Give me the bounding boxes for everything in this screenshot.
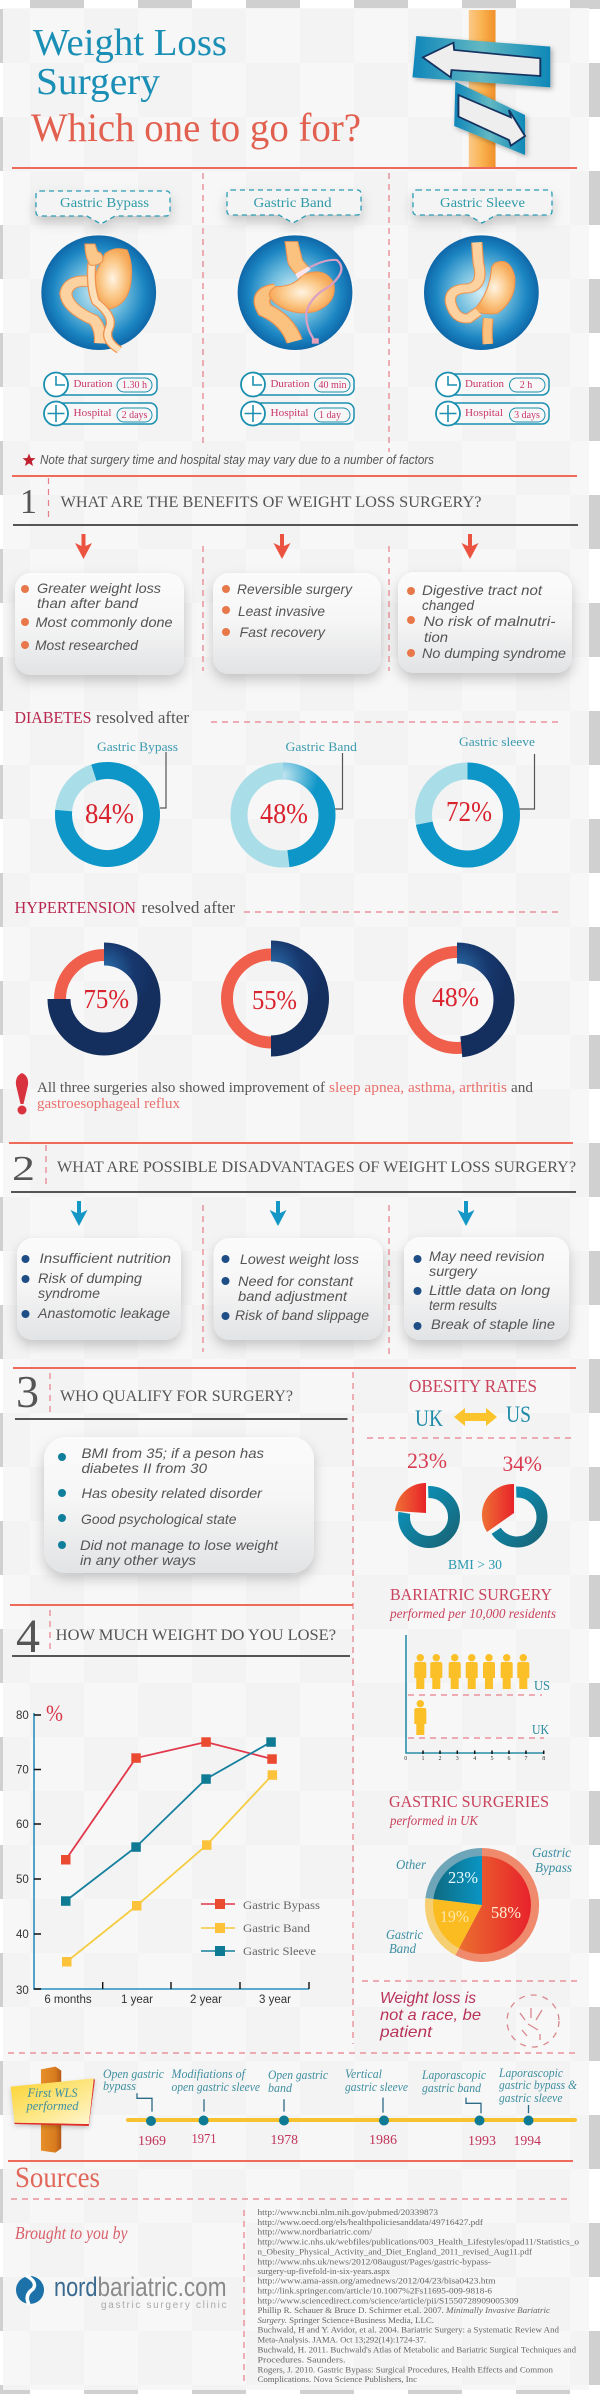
text: source list: http://www.ama-assn.org/amednews/2012/04/23/bisa0423.htm	[258, 2276, 496, 2286]
panel: obesity rates	[367, 1376, 573, 1573]
heading: diabetes	[14, 708, 559, 727]
event 1993: Laporascopic	[421, 2068, 486, 2082]
panel: disadvantages sleeve: May need revision	[429, 1248, 545, 1264]
panel: disadvantages sleeve: Little data on long	[429, 1282, 550, 1298]
panel: disadvantages bypass: syndrome	[38, 1285, 100, 1301]
section 1 heading: 1	[20, 482, 37, 521]
chart: hypertension 55 donut: 55%	[252, 985, 297, 1015]
series: gastric bypass	[61, 1737, 277, 1864]
section 4 heading: 4	[16, 1610, 40, 1663]
chart: diabetes bypass donut: Gastric Bypass	[97, 739, 178, 754]
panel: disadvantages band: Need for constant	[238, 1273, 354, 1289]
heading: hypertension: resolved after	[142, 898, 235, 917]
icon: first WLS signpost: First WLS	[27, 2086, 78, 2100]
hospital row: Hospital	[465, 407, 503, 419]
panel: gastric sleeve	[413, 190, 552, 426]
chart: weight loss line chart: 6 months	[44, 1994, 92, 2006]
chart: people per 10,000 residents: 0	[404, 1756, 407, 1762]
panel: disadvantages sleeve: Break of staple line	[431, 1316, 555, 1332]
chart: weight loss line chart: 40	[16, 1929, 29, 1941]
chart legend	[201, 1898, 320, 1958]
text: brought to you by: Brought to you by	[15, 2223, 128, 2243]
chart: people per 10,000 residents: 6	[508, 1756, 510, 1762]
event 1994: 1994	[514, 2134, 541, 2149]
panel: disadvantages sleeve: term results	[429, 1297, 497, 1313]
text: source list: Surgery. Springer Science+Business Media, LLC.	[258, 2315, 434, 2325]
text: source list: http://www.ncbi.nlm.nih.gov/pubmed/20339873	[258, 2207, 438, 2217]
panel: gastric bypass	[36, 191, 170, 426]
panel: bariatric surgery: BARIATRIC SURGERY	[390, 1585, 552, 1604]
panel: who qualifies: BMI from 35; if a peson has	[82, 1445, 264, 1461]
chart: gastric surgeries pie: 23%	[448, 1868, 478, 1887]
chart: hypertension 48 donut	[409, 952, 505, 1048]
series: gastric sleeve	[61, 1737, 276, 1906]
event 1971: 1971	[192, 2132, 216, 2147]
panel: benefits sleeve: No risk of malnutri-	[424, 613, 556, 629]
arrow: benefits bypass	[75, 534, 92, 559]
icon: gastric band stomach	[238, 235, 352, 350]
title: Surgery	[36, 61, 160, 103]
panel: benefits sleeve: changed	[422, 597, 475, 613]
panel: benefits band: Fast recovery	[240, 624, 326, 640]
event 1986: 1986	[369, 2133, 397, 2148]
panel: benefits bypass: Most commonly done	[36, 614, 173, 630]
chart: diabetes bypass donut: 84%	[85, 799, 134, 830]
event 1994: gastric sleeve	[499, 2091, 563, 2105]
duration row: 1.30 h	[122, 380, 147, 391]
section 1 heading	[13, 478, 578, 526]
panel: who qualifies: Good psychological state	[81, 1511, 237, 1527]
panel: obesity rates: 34%	[502, 1451, 542, 1476]
panel: gastric surgeries: Other	[396, 1858, 426, 1873]
panel: obesity rates: OBESITY RATES	[409, 1376, 537, 1396]
event 1971	[171, 2067, 260, 2147]
text: other improvements: gastroesophageal reflux	[37, 1096, 180, 1112]
panel: gastric band	[227, 190, 361, 426]
hospital row: 2 days	[122, 410, 148, 421]
section 4 heading	[10, 1604, 353, 1663]
panel: disadvantages bypass: Risk of dumping	[38, 1270, 142, 1286]
note with star: Note that surgery time and hospital stay may vary due to a number of factors	[40, 453, 434, 467]
event 1969: Open gastric	[103, 2067, 164, 2081]
callout: gastric band: Gastric Band	[254, 196, 332, 211]
section 2 heading: 2	[12, 1149, 35, 1188]
text: other improvements	[37, 1080, 533, 1112]
hospital row	[44, 402, 157, 426]
panel: bariatric surgery: performed per 10,000 residents	[389, 1607, 557, 1622]
text: source list: Buchwald, H and Y. Avidor, et al. 2004. Bariatric Surgery: a Systematic Review And	[258, 2325, 560, 2335]
event 1969	[103, 2067, 166, 2149]
callout: gastric sleeve	[413, 190, 552, 223]
chart legend: Gastric Bypass	[243, 1898, 320, 1912]
event 1978	[268, 2068, 328, 2148]
duration row	[44, 372, 157, 396]
callout: gastric band	[227, 190, 361, 223]
icon: double arrow	[454, 1408, 497, 1426]
heading: sources: Sources	[15, 2161, 100, 2194]
panel: who qualifies: diabetes II from 30	[82, 1460, 207, 1476]
chart: weight loss line chart	[16, 1701, 320, 2006]
icon: exclamation mark	[16, 1073, 28, 1114]
text: source list: Buchwald, H. 2011. Buchwald's Atlas of Metabolic and Bariatric Surgical Techniques and	[258, 2345, 577, 2355]
chart: diabetes band donut: Gastric Band	[286, 739, 358, 754]
hospital row	[436, 402, 549, 426]
chart: diabetes band donut: 48%	[260, 799, 308, 830]
event 1978: Open gastric	[268, 2068, 328, 2082]
title: Weight Loss	[33, 22, 227, 64]
chart: weight loss line chart: 50	[16, 1874, 29, 1886]
arrow: disadvantages sleeve	[458, 1201, 474, 1226]
callout: weight loss is not a race: not a race, be	[380, 2007, 481, 2024]
callout: weight loss is not a race: patient	[379, 2024, 433, 2041]
heading: hypertension: HYPERTENSION	[14, 898, 136, 917]
chart: people per 10,000 residents: 2	[438, 1756, 442, 1762]
event 1971: Modifiations of	[171, 2067, 246, 2081]
text: source list: http://www.nhs.uk/news/2012/08august/Pages/gastric-bypass-	[258, 2256, 491, 2266]
event 1993: gastric band	[422, 2081, 482, 2095]
arrow: disadvantages bypass	[70, 1201, 88, 1226]
panel: obesity rates: UK	[415, 1406, 443, 1431]
section 2 heading: WHAT ARE POSSIBLE DISADVANTAGES OF WEIGHT LOSS SURGERY?	[57, 1159, 576, 1176]
heading: diabetes: resolved after	[96, 708, 189, 727]
event 1986: Vertical	[345, 2067, 382, 2081]
section 3 heading: WHO QUALIFY FOR SURGERY?	[60, 1388, 293, 1405]
icon: gastric sleeve stomach	[424, 235, 539, 350]
panel: gastric surgeries: Gastric	[532, 1846, 572, 1861]
title	[31, 22, 361, 150]
text: source list: http://www.ic.nhs.uk/webfiles/publications/003_Health_Lifestyles/opad11/Statistics_o	[258, 2237, 579, 2247]
panel: disadvantages bypass: Insufficient nutrition	[40, 1250, 171, 1266]
heading: hypertension	[14, 898, 562, 917]
panel: disadvantages sleeve: surgery	[429, 1263, 478, 1279]
arrow: benefits sleeve	[462, 534, 478, 559]
callout: gastric sleeve: Gastric Sleeve	[440, 196, 525, 211]
logo: nordbariatric.com: nord	[54, 2272, 98, 2302]
chart: weight loss line chart: 2 year	[190, 1994, 222, 2006]
chart: UK obesity donut	[395, 1483, 454, 1542]
panel: benefits sleeve: Digestive tract not	[422, 582, 543, 598]
chart: gastric surgeries pie: 58%	[491, 1903, 521, 1922]
panel: disadvantages band: band adjustment	[238, 1288, 348, 1304]
panel: benefits bypass: Greater weight loss	[37, 580, 161, 596]
text: source list: Rogers, J. 2010. Gastric Bypass: Surgical Procedures, Health Effects and Common	[258, 2364, 554, 2374]
text: source list: Phillip R. Schauer & Bruce D. Schirmer et.al. 2007. Minimally Invasive Bariatric	[258, 2305, 550, 2315]
chart: people per 10,000 residents: US	[534, 1679, 550, 1694]
panel: gastric surgeries: GASTRIC SURGERIES	[389, 1792, 549, 1811]
timeline	[103, 2066, 577, 2149]
event 1994: Laporascopic	[498, 2066, 563, 2080]
duration row: 40 min	[318, 380, 347, 391]
section 1 heading: WHAT ARE THE BENEFITS OF WEIGHT LOSS SURGERY?	[60, 494, 482, 511]
text: source list: Procedures. Saunders.	[258, 2354, 346, 2364]
panel: obesity rates: US	[506, 1402, 531, 1427]
chart: gastric surgeries pie: 19%	[440, 1907, 469, 1926]
text: source list: Meta-Analysis. JAMA. Oct 13;292(14):1724-37.	[258, 2335, 426, 2345]
panel: who qualifies: in any other ways	[80, 1552, 196, 1568]
panel: benefits band	[213, 573, 381, 674]
chart: hypertension 55 donut	[224, 951, 318, 1046]
panel: benefits sleeve	[398, 572, 572, 673]
text: other improvements: and	[511, 1080, 533, 1096]
panel: disadvantages band	[214, 1238, 383, 1340]
text: source list: http://link.springer.com/article/10.1007%2Fs11695-009-9818-6	[258, 2286, 493, 2296]
event 1969: bypass	[103, 2079, 136, 2093]
icon: gastric bypass stomach	[41, 235, 156, 350]
title: Which one to go for?	[31, 105, 361, 150]
event 1994: gastric bypass &	[499, 2078, 577, 2092]
text: source list: http://www.sciencedirect.com/science/article/pii/S1550728909005309	[258, 2295, 518, 2305]
chart: US obesity donut	[482, 1484, 542, 1542]
panel: who qualifies	[44, 1437, 314, 1573]
chart: people per 10,000 residents: 3	[456, 1756, 459, 1762]
duration row	[436, 372, 549, 396]
duration row	[241, 372, 354, 396]
duration row: Duration	[74, 378, 113, 390]
panel: bariatric surgery	[389, 1585, 557, 1762]
chart: weight loss line chart: 3 year	[259, 1994, 291, 2006]
logo: nordbariatric.com	[16, 2272, 226, 2311]
section 3 heading: 3	[16, 1367, 39, 1417]
panel: disadvantages bypass	[17, 1238, 181, 1340]
hospital row: 3 days	[514, 410, 540, 421]
event 1978: 1978	[270, 2133, 298, 2148]
chart: people per 10,000 residents: 4	[473, 1756, 476, 1762]
event 1971: open gastric sleeve	[172, 2080, 260, 2094]
panel: gastric surgeries	[386, 1792, 573, 1962]
hospital row: 1 day	[319, 410, 341, 421]
panel: disadvantages sleeve	[404, 1237, 569, 1340]
text: source list: surgery-up-fivefold-in-six-years.aspx	[258, 2266, 391, 2276]
hospital row: Hospital	[270, 407, 308, 419]
panel: gastric surgeries: Band	[389, 1942, 417, 1957]
text: source list: http://www.oecd.org/els/healthpoliciesanddata/49716427.pdf	[258, 2217, 483, 2227]
chart: weight loss line chart: 80	[16, 1710, 29, 1722]
chart: diabetes sleeve donut: 72%	[446, 797, 492, 828]
chart: people per 10,000 residents: 8	[542, 1756, 545, 1762]
section 4 heading: HOW MUCH WEIGHT DO YOU LOSE?	[56, 1627, 336, 1644]
panel: benefits band: Least invasive	[238, 603, 325, 619]
callout: weight loss is not a race	[379, 1990, 559, 2047]
chart: diabetes sleeve donut: Gastric sleeve	[459, 734, 535, 749]
panel: benefits bypass: than after band	[37, 595, 139, 611]
event 1978: band	[268, 2081, 293, 2095]
chart: weight loss line chart: 70	[16, 1764, 29, 1776]
arrow: benefits band	[274, 534, 290, 559]
callout: gastric bypass: Gastric Bypass	[60, 196, 149, 211]
panel: benefits band: Reversible surgery	[237, 581, 353, 597]
chart legend: Gastric Sleeve	[243, 1944, 316, 1958]
event 1986	[345, 2067, 408, 2148]
event 1994	[498, 2066, 577, 2149]
chart: hypertension 75 donut: 75%	[84, 984, 129, 1014]
chart: hypertension 48 donut: 48%	[432, 982, 479, 1012]
icon: dashed scribble circle	[507, 1995, 559, 2047]
event 1986: gastric sleeve	[345, 2080, 408, 2094]
panel: benefits bypass	[15, 573, 184, 675]
panel: gastric surgeries: Gastric	[386, 1928, 424, 1943]
hospital row	[241, 402, 354, 426]
series: gastric band	[62, 1770, 277, 1966]
panel: obesity rates: BMI > 30	[448, 1558, 502, 1573]
duration row: Duration	[270, 378, 310, 390]
hospital row: Hospital	[74, 407, 112, 419]
chart: gastric surgeries pie	[425, 1848, 539, 1962]
text: other improvements: sleep apnea, asthma, arthritis	[329, 1080, 507, 1096]
panel: benefits sleeve: No dumping syndrome	[422, 645, 566, 661]
chart: people per 10,000 residents: 5	[490, 1756, 494, 1762]
text: other improvements: All three surgeries also showed improvement of	[37, 1080, 325, 1096]
panel: benefits bypass: Most researched	[35, 637, 139, 653]
chart: weight loss line chart: 30	[16, 1985, 29, 1997]
text: source list: n_Obesity_Physical_Activity_and_Diet_England_2011_revised_Aug11.pdf	[258, 2246, 532, 2256]
callout: gastric bypass	[36, 191, 170, 224]
heading: diabetes: DIABETES	[14, 708, 92, 727]
duration row: 2 h	[520, 380, 532, 391]
panel: who qualifies: Has obesity related disorder	[82, 1485, 263, 1501]
text: source list	[258, 2207, 579, 2384]
chart: people per 10,000 residents: 7	[524, 1756, 528, 1762]
panel: gastric surgeries: Bypass	[535, 1861, 573, 1876]
logo: nordbariatric.com: bariatric.com	[98, 2272, 226, 2302]
chart: diabetes band donut	[239, 739, 358, 859]
callout: weight loss is not a race: Weight loss is	[380, 1990, 476, 2007]
panel: gastric surgeries: performed in UK	[389, 1814, 479, 1829]
panel: disadvantages band: Lowest weight loss	[240, 1251, 359, 1267]
panel: obesity rates: 23%	[407, 1448, 447, 1473]
event 1969: 1969	[138, 2134, 166, 2149]
chart: diabetes sleeve donut	[424, 734, 535, 859]
event 1993	[421, 2068, 496, 2149]
chart: weight loss line chart: 1 year	[121, 1994, 153, 2006]
logo: nordbariatric.com: gastric surgery clinic	[101, 2300, 226, 2311]
chart legend: Gastric Band	[243, 1921, 310, 1935]
panel: disadvantages band: Risk of band slippage	[235, 1307, 369, 1323]
arrow: disadvantages band	[270, 1201, 286, 1226]
chart: diabetes bypass donut	[52, 739, 178, 870]
icon: first WLS signpost	[11, 2067, 95, 2153]
panel: disadvantages bypass: Anastomotic leakage	[37, 1305, 170, 1321]
chart: hypertension 75 donut	[59, 954, 149, 1044]
chart: weight loss line chart: 60	[16, 1819, 29, 1831]
panel: who qualifies: Did not manage to lose weight	[80, 1537, 279, 1553]
text: source list: http://www.nordbariatric.com/	[258, 2227, 373, 2237]
section 3 heading	[15, 1367, 348, 1420]
event 1993: 1993	[468, 2134, 496, 2149]
text: source list: Complications. Nova Science Publishers, Inc	[258, 2374, 417, 2384]
chart: weight loss line chart: %	[46, 1701, 63, 1726]
icon: direction signpost	[412, 10, 550, 168]
icon: first WLS signpost: performed	[26, 2099, 79, 2113]
section 2 heading	[11, 1145, 576, 1193]
chart: people per 10,000 residents: UK	[532, 1723, 549, 1738]
chart: people per 10,000 residents	[404, 1635, 550, 1762]
panel: benefits sleeve: tion	[424, 629, 448, 645]
duration row: Duration	[465, 378, 504, 390]
chart: people per 10,000 residents: 1	[422, 1756, 424, 1762]
